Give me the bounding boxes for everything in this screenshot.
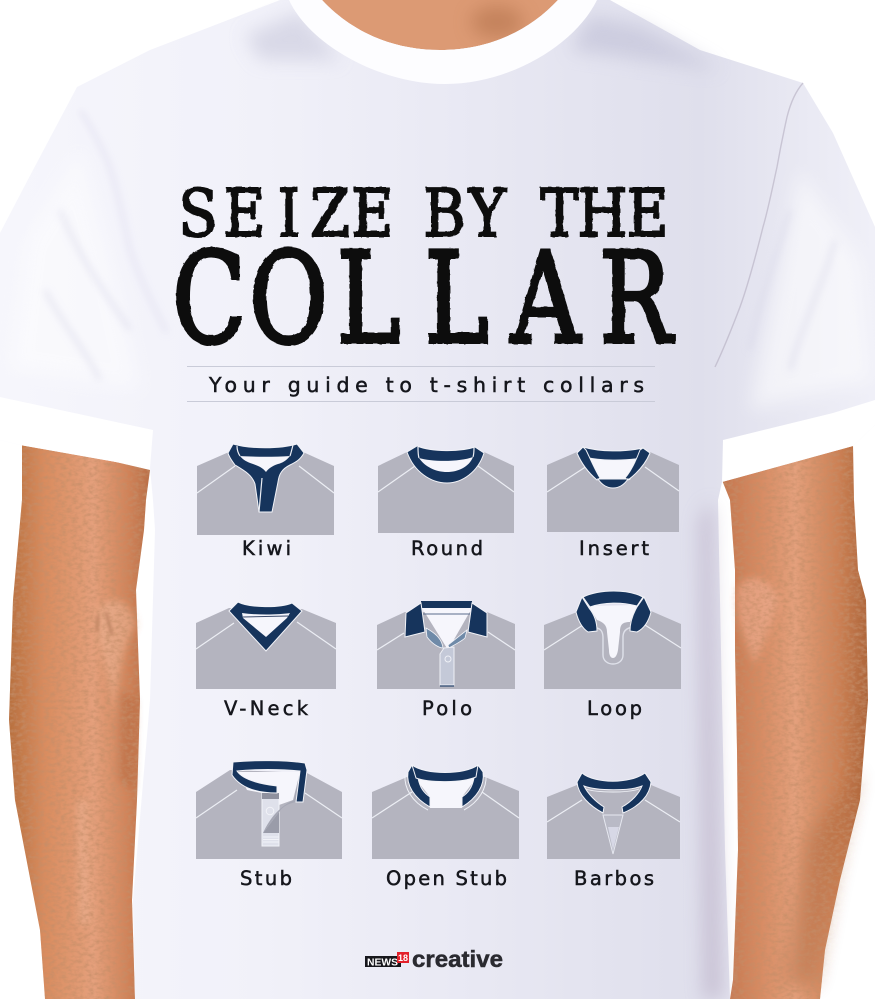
loop neck opening [589, 605, 637, 658]
loop right flap [630, 597, 651, 632]
label: stub: Stub [240, 867, 292, 890]
round collar ring [407, 446, 484, 483]
collar: loop [544, 591, 681, 689]
logo: news18 creative: 18 [398, 953, 408, 964]
news box [365, 956, 401, 967]
label: v-neck: V-Neck [224, 697, 309, 720]
label: round: Round [411, 537, 483, 560]
neck [322, 0, 558, 50]
right body shade [700, 500, 722, 999]
polo placket [440, 647, 454, 685]
label: open stub: Open Stub [386, 867, 507, 890]
polo right flap [468, 603, 487, 637]
sleeve hem left [0, 397, 153, 468]
loop back band [583, 591, 643, 607]
collar: barbos [547, 773, 680, 859]
neck shadow [471, 6, 523, 38]
sleeve seam right [715, 83, 803, 367]
logo: news18 creative [365, 946, 503, 972]
shoulder shadow right [570, 15, 720, 70]
open stub right flap [462, 765, 483, 807]
polo neck opening [422, 608, 472, 650]
left arm [9, 440, 150, 999]
insert back band [583, 447, 643, 460]
collar: v-neck [196, 602, 336, 689]
barbos placket [603, 815, 623, 854]
subtitle: Your guide to t-shirt collars [208, 373, 644, 397]
collar: kiwi [197, 444, 334, 535]
polo right lapel [448, 630, 467, 648]
sleeve highlight right [750, 170, 870, 410]
sleeve folds [45, 210, 835, 380]
open stub back band [412, 765, 478, 782]
label: barbos: Barbos [574, 867, 654, 890]
sleeve highlight left [10, 150, 140, 390]
shoulder shadow left [245, 12, 340, 60]
loop outer stitch [592, 627, 636, 664]
collar: round [378, 446, 514, 533]
insert right strip [625, 448, 650, 480]
loop left flap [576, 597, 597, 632]
polo left lapel [426, 628, 443, 648]
insert neck opening [585, 456, 642, 480]
v-neck collar shape [229, 602, 302, 651]
sleeve hem right [722, 400, 875, 482]
collar: polo [377, 601, 515, 689]
collar: open stub [372, 765, 519, 859]
insert bottom piece [598, 479, 628, 488]
red 18 box [397, 952, 409, 963]
stub flap [263, 812, 279, 833]
logo: news18 creative: NEWS [367, 958, 398, 968]
title line two: COLLAR [172, 226, 674, 372]
kiwi collar shape [228, 444, 304, 512]
polo left flap [405, 603, 425, 637]
neck ribbing [289, 0, 597, 84]
polo back band [421, 601, 472, 608]
sleeve fold left [80, 110, 167, 333]
collar: stub [196, 761, 342, 859]
collar: insert [547, 447, 679, 532]
barbos collar band [577, 773, 651, 813]
label: kiwi: Kiwi [242, 537, 291, 560]
right arm [722, 445, 868, 999]
label: loop: Loop [587, 697, 642, 720]
label: polo: Polo [422, 697, 472, 720]
title [172, 175, 674, 372]
insert left strip [577, 447, 600, 480]
creative wordmark: creative [412, 946, 503, 972]
label: insert: Insert [579, 537, 649, 560]
stub placket [262, 793, 279, 846]
stub neck opening [238, 772, 300, 833]
stub collar band [232, 761, 307, 802]
stub button [266, 807, 274, 815]
polo button [445, 656, 451, 662]
open stub neck opening [415, 777, 477, 808]
barbos insert [608, 827, 619, 850]
title line one: SEIZE BY THE [178, 175, 668, 252]
open stub left flap [408, 765, 430, 807]
